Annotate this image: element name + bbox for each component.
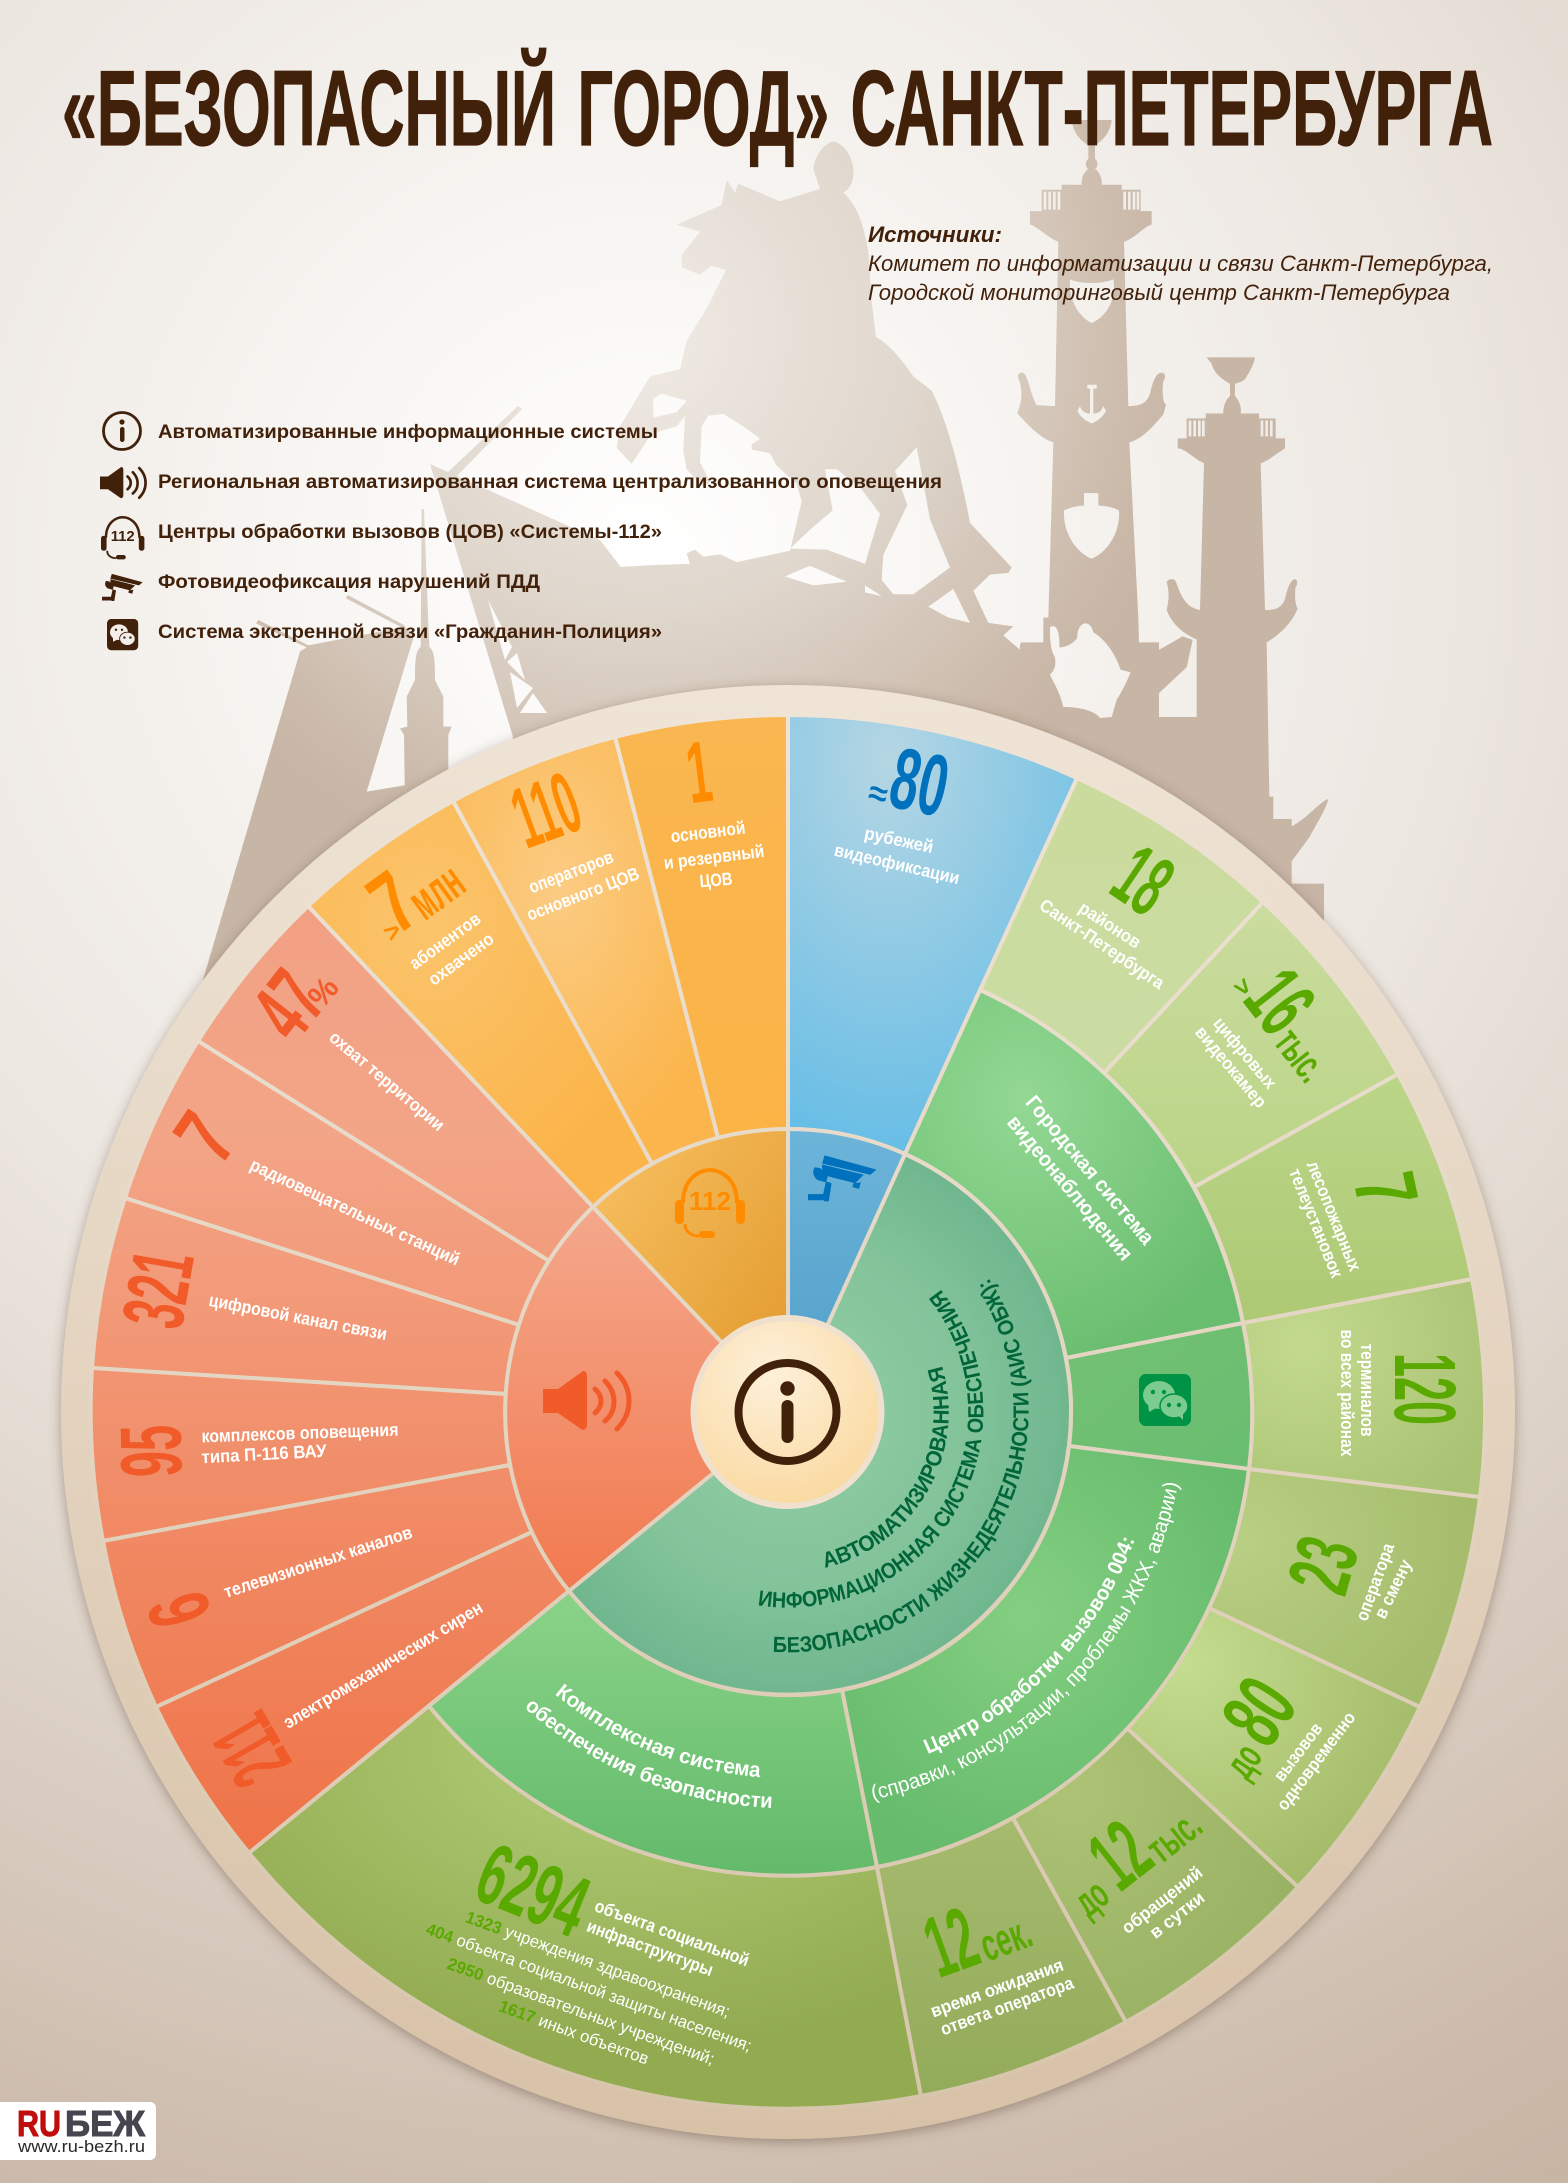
label: TV channels: телевизионных каналов	[221, 1522, 415, 1602]
label: sirens: электромеханических сирен	[280, 1597, 486, 1733]
symbol: more than: >	[377, 915, 407, 948]
panel: red 6	[103, 1465, 532, 1707]
icon: CCTV camera	[102, 574, 143, 601]
unit: percent: %	[300, 970, 346, 1014]
label: terminals: терминалов	[1357, 1344, 1377, 1436]
prefix: up to: до	[1215, 1735, 1271, 1786]
label: waiting time: ответа оператора	[938, 1972, 1077, 2039]
panel: red 95	[91, 1368, 510, 1541]
panel: blue inner wedge	[788, 1129, 905, 1412]
number: 12: 12	[1072, 1802, 1169, 1908]
label: waiting time: время ожидания	[928, 1955, 1066, 2021]
label: fire installations: лесопожарных	[1303, 1158, 1365, 1274]
number: 47: 47	[233, 953, 344, 1057]
unit: thousand: тыс.	[1137, 1800, 1210, 1872]
panel: 120 terminals: 120	[1376, 1353, 1473, 1425]
label: territory coverage: охват территории	[325, 1027, 449, 1135]
legend text: notification system: Региональная автоматизированная система централизованного оповещения	[158, 472, 942, 493]
label: operators: основного ЦОВ	[524, 863, 642, 925]
label: per shift: в смену	[1370, 1556, 1416, 1622]
icon: headset 112	[101, 517, 144, 559]
panel: 7 fire towers	[1194, 1074, 1472, 1323]
panel: up to 80 calls	[1127, 1608, 1420, 1887]
label: social objects: объекта социальной	[592, 1896, 752, 1970]
sources	[868, 222, 1493, 305]
number: 7: 7	[1335, 1164, 1436, 1216]
number: 80: 80	[1204, 1661, 1315, 1762]
prefix: up to: до	[1065, 1870, 1118, 1925]
label: warning complexes	[201, 1420, 399, 1467]
number: 7: 7	[351, 853, 436, 952]
logo: БЕЖ	[65, 2103, 145, 2144]
icon: loudspeaker	[543, 1371, 629, 1430]
number: 321: 321	[104, 1243, 213, 1335]
panel: red 47 percent	[198, 906, 593, 1261]
icon: information	[104, 412, 140, 450]
icon: chat	[107, 619, 138, 650]
number: 110: 110	[500, 754, 593, 867]
label: terminals: во всех районах	[1337, 1330, 1357, 1456]
logo	[0, 2102, 156, 2160]
panel: 004 call centre	[844, 1444, 1251, 1868]
label: districts: Санкт-Петербурга	[1036, 895, 1169, 994]
panel: city video surveillance	[905, 990, 1243, 1358]
legend text: call centres: Центры обработки вызовов (ЦОВ) «Системы-112»	[158, 522, 662, 543]
panel: 18 districts	[980, 778, 1263, 1073]
unit: thousand: тыс.	[1266, 1019, 1336, 1091]
panel: orange inner wedge	[593, 1129, 788, 1412]
icon: loudspeaker	[100, 467, 146, 498]
number: 211: 211	[193, 1698, 309, 1802]
legend	[100, 412, 942, 650]
outer ring	[61, 685, 1515, 2139]
label: AIS line 1: АВТОМАТИЗИРОВАННАЯ	[825, 1366, 949, 1568]
number: 7: 7	[156, 1096, 255, 1178]
sources: Комитет по информатизации и связи Санкт-Петербурга,	[868, 251, 1493, 276]
panel: blue about 80 checkpoints	[788, 715, 1077, 1154]
centre circle with information icon	[694, 1318, 882, 1506]
number: 6294: 6294	[464, 1825, 602, 1956]
label: main and backup: и резервный	[663, 841, 765, 873]
label: AIS line 3: БЕЗОПАСНОСТИ ЖИЗНЕДЕЯТЕЛЬНОСТИ (АИС ОБЖ):	[774, 1279, 1032, 1652]
legend text: information systems: Автоматизированные информационные системы	[158, 422, 658, 443]
panel: red 7 stations	[125, 1041, 549, 1325]
label: complex security line 2: обеспечения безопасности	[526, 1702, 772, 1808]
number: 18: 18	[1096, 827, 1190, 934]
panel: 12 seconds	[877, 1818, 1126, 2096]
label: requests per day: обращений	[1118, 1862, 1206, 1938]
label: radio stations: радиовещательных станций	[247, 1155, 463, 1269]
panel: 23 operators	[1209, 1469, 1480, 1707]
sources: Источники:	[868, 222, 1002, 247]
label: subscribers covered: охвачено	[424, 929, 498, 989]
label: main and backup	[663, 818, 765, 891]
sources: Городской мониторинговый центр Санкт-Петербурга	[868, 280, 1450, 305]
panel: 6294 social infrastructure	[249, 1706, 921, 2109]
panel: up to 12 thousand	[1013, 1728, 1298, 2022]
panel: 120 terminals	[1243, 1279, 1485, 1497]
panel: complex security system	[429, 1591, 878, 1878]
label: digital cameras: цифровых	[1209, 1013, 1281, 1093]
main wheel	[54, 680, 1522, 2149]
label: 004 call centre: Центр обработки вызовов 004:	[923, 1538, 1134, 1754]
unit: sec: сек.	[973, 1905, 1038, 1971]
label: per shift: оператора	[1352, 1540, 1399, 1623]
symbol: approximately: ≈	[865, 773, 891, 815]
panel: red inner wedge	[505, 1207, 788, 1591]
label: warning complexes: комплексов оповещения	[201, 1420, 399, 1446]
breakdown list: 2950 образовательных учреждений;	[445, 1954, 717, 2069]
label: subscribers covered: абонентов	[406, 909, 484, 973]
panel: emergency link wedge	[1066, 1323, 1252, 1469]
panel: red 321	[92, 1198, 519, 1394]
breakdown list: 1323 учреждения здравоохранения;	[463, 1908, 733, 2021]
logo: www.ru-bezh.ru	[17, 2137, 145, 2156]
breakdown list: 1617 иных объектов	[496, 1997, 651, 2068]
unit: mln: млн	[398, 852, 476, 931]
symbol: more than: >	[1227, 972, 1259, 1002]
label: digital cameras: видеокамер	[1191, 1022, 1271, 1112]
icon: headset 112: 112	[111, 529, 135, 545]
legend text: traffic violations: Фотовидеофиксация нарушений ПДД	[158, 572, 540, 593]
label: city video surveillance: видеонаблюдения	[1002, 1111, 1137, 1265]
label: checkpoints: рубежей	[863, 823, 935, 857]
panel: teal central system wedge	[569, 1153, 1073, 1693]
number: 12: 12	[912, 1889, 990, 1996]
number: 95: 95	[103, 1424, 200, 1478]
icon: headset 112: 112	[689, 1186, 731, 1216]
panel: more than 16 thousand cameras	[1104, 902, 1398, 1187]
label: AIS line 2: ИНФОРМАЦИОННАЯ СИСТЕМА ОБЕСПЕЧЕНИЯ	[758, 1290, 984, 1608]
label: requests per day: в сутки	[1146, 1887, 1208, 1943]
breakdown list: 404 объекта социальной защиты населения;	[423, 1920, 754, 2055]
label: main and backup: ЦОВ	[699, 869, 733, 891]
label: districts: районов	[1075, 898, 1145, 952]
label: operators: операторов	[526, 847, 616, 897]
label: simultaneous calls: вызовов	[1270, 1719, 1326, 1785]
label: social objects: инфраструктуры	[584, 1916, 716, 1980]
label: city video surveillance: Городская система	[1021, 1091, 1159, 1250]
number: 6: 6	[129, 1582, 230, 1638]
label: checkpoints	[832, 823, 962, 888]
label: terminals	[1337, 1330, 1377, 1456]
logo: RU	[17, 2103, 61, 2144]
panel: orange 110 operators	[453, 737, 718, 1164]
number: 1: 1	[681, 723, 717, 822]
icon: chat	[1139, 1374, 1191, 1426]
background silhouette: Bronze Horseman, rostral columns, cathedral	[202, 120, 1328, 981]
number: 80: 80	[882, 729, 957, 836]
label: simultaneous calls: одновременно	[1273, 1708, 1359, 1814]
icon: headset 112	[675, 1170, 745, 1238]
number: 16: 16	[1226, 952, 1333, 1051]
icon: CCTV camera	[808, 1155, 876, 1201]
label: 004 services: (справки, консультации, проблемы ЖКХ, аварии)	[872, 1483, 1182, 1803]
panel: orange 1 main and backup centre	[615, 715, 788, 1138]
label: warning complexes: типа П-116 ВАУ	[201, 1441, 328, 1467]
panel: red 211	[156, 1532, 569, 1853]
legend text: emergency link: Система экстренной связи «Гражданин-Полиция»	[158, 622, 662, 643]
panel: orange 7 million subscribers	[308, 801, 652, 1207]
label: fire installations: телеустановок	[1285, 1165, 1347, 1281]
label: checkpoints: видеофиксации	[832, 840, 962, 888]
label: complex security line 1: Комплексная система	[556, 1684, 760, 1778]
label: digital channel: цифровой канал связи	[207, 1290, 389, 1344]
number: 23: 23	[1270, 1527, 1377, 1603]
label: main and backup: основной	[670, 818, 746, 846]
